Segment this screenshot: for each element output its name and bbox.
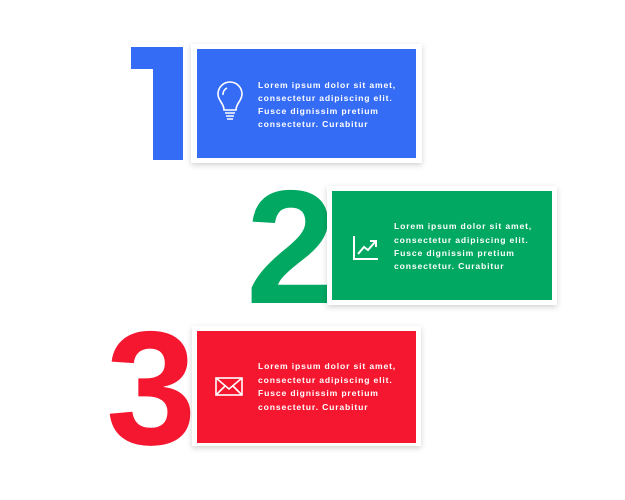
text block 1: consectetur adipiscing elit. [258, 93, 393, 103]
text block 2: Lorem ipsum dolor sit amet, [394, 221, 532, 231]
panel 3 [192, 326, 421, 446]
text block 3: Lorem ipsum dolor sit amet, [258, 361, 396, 371]
text block 3: consectetur adipiscing elit. [258, 375, 393, 385]
icon: envelope [216, 378, 242, 395]
text block 2: Fusce dignissim pretium [394, 248, 515, 258]
text block 3 [258, 361, 396, 412]
text block 1: Fusce dignissim pretium [258, 106, 379, 116]
text block 1: Lorem ipsum dolor sit amet, [258, 80, 396, 90]
text block 2: consectetur. Curabitur [394, 261, 504, 271]
panel 1 [191, 44, 422, 163]
panel 2 [327, 186, 557, 305]
text block 3: consectetur. Curabitur [258, 402, 368, 412]
digit 3: 3 [106, 298, 196, 479]
icon: chart [354, 236, 378, 259]
digit 1 [131, 47, 183, 160]
text block 1 [258, 80, 396, 129]
text block 3: Fusce dignissim pretium [258, 388, 379, 398]
digit 2: 2 [246, 157, 336, 338]
text block 1: consectetur. Curabitur [258, 119, 368, 129]
text block 2: consectetur adipiscing elit. [394, 235, 529, 245]
text block 2 [394, 221, 532, 271]
icon: light bulb [218, 82, 242, 119]
